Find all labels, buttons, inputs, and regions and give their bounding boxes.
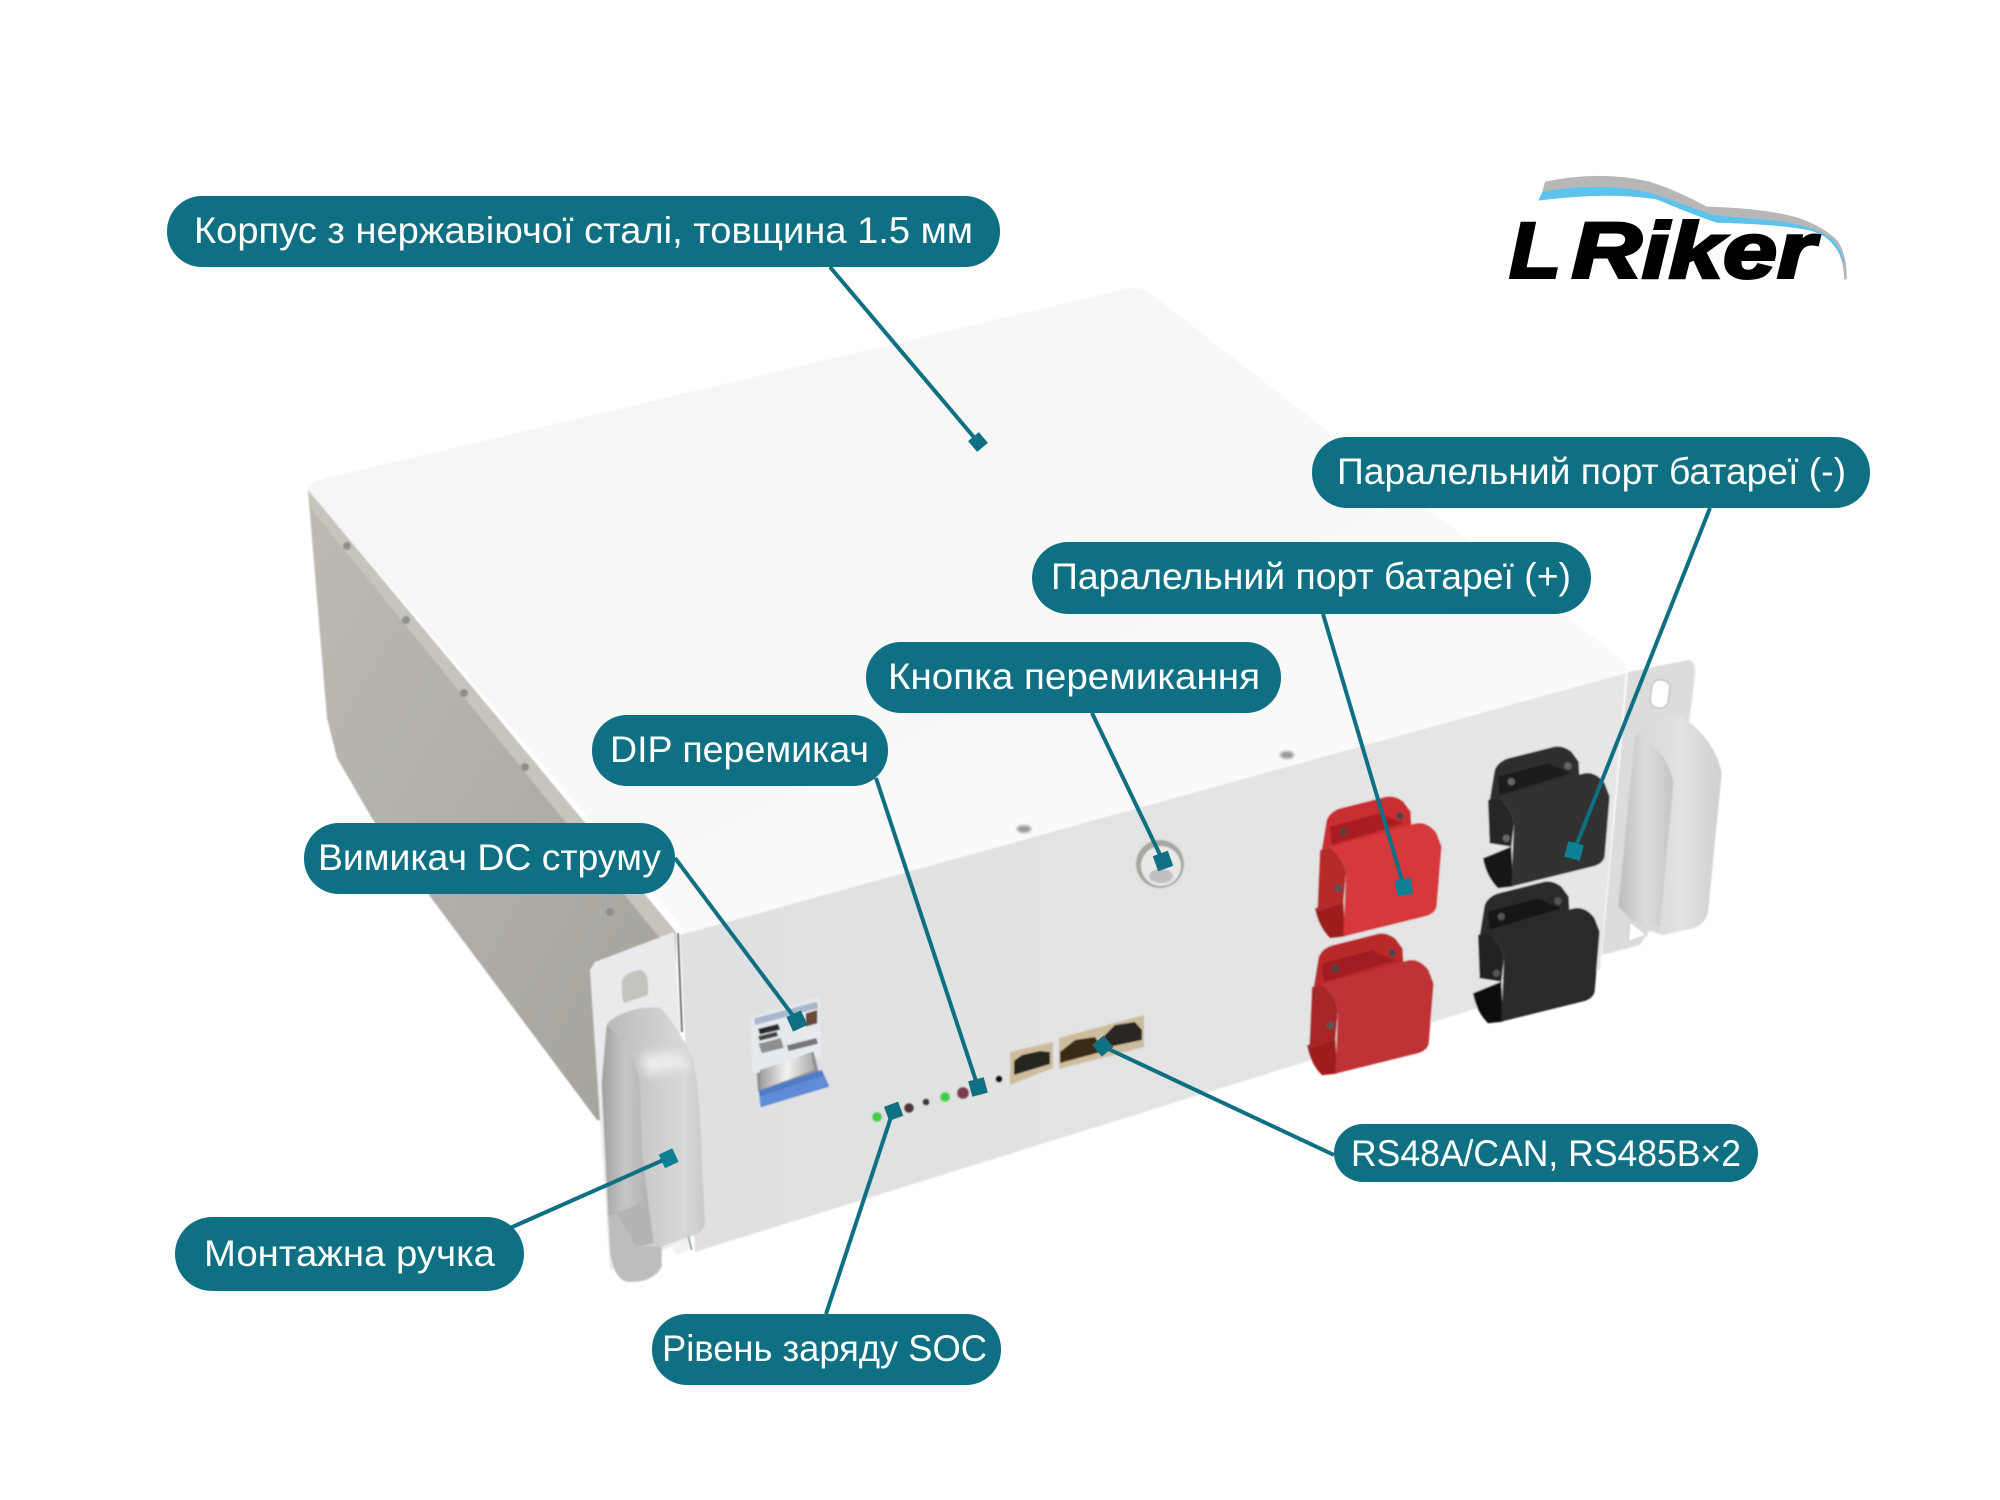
leader: toggle button xyxy=(1092,713,1173,871)
top screws xyxy=(1017,751,1294,833)
battery illustration xyxy=(308,288,1722,1282)
icon: red connector top xyxy=(1315,796,1442,938)
callout: DC breaker: Вимикач DC струму xyxy=(318,837,661,878)
panel: left side face xyxy=(308,490,676,1130)
icon: toggle button xyxy=(1136,840,1184,888)
icon: RJ45 ports xyxy=(1010,1015,1144,1085)
callout: RS485 ports xyxy=(1334,1124,1758,1182)
leader: RS485 xyxy=(1092,1035,1334,1155)
logo wordmark: Riker xyxy=(1572,207,1820,295)
front top lip xyxy=(680,664,1626,935)
right flange slot xyxy=(1649,679,1671,709)
flange edge xyxy=(678,933,682,1032)
callout: mounting handle xyxy=(175,1217,524,1291)
panel: front face xyxy=(680,673,1626,1252)
panel: top face xyxy=(308,288,1628,925)
leader: positive port xyxy=(1323,614,1413,896)
callout: DIP switch: DIP перемикач xyxy=(610,729,869,770)
icon: DC breaker xyxy=(751,997,830,1107)
leader: DC breaker xyxy=(675,858,808,1032)
panel: left mounting flange xyxy=(590,932,690,1270)
callout: RS485 ports: RS48A/CAN, RS485B×2 xyxy=(1351,1133,1741,1174)
left face lip strip xyxy=(308,490,676,958)
logo swoosh grey xyxy=(1540,176,1847,279)
icon: red connector bottom xyxy=(1307,933,1434,1075)
callout: stainless housing: Корпус з нержавіючої сталі, товщина 1.5 мм xyxy=(194,210,973,251)
side screws xyxy=(343,542,614,916)
leader: negative port xyxy=(1564,508,1710,861)
callout: DIP switch xyxy=(592,715,888,786)
callout: parallel port positive xyxy=(1032,542,1591,614)
logo wordmark: L xyxy=(1509,207,1561,295)
callout: parallel port negative xyxy=(1312,437,1870,508)
icon: black connector top xyxy=(1483,746,1610,888)
callout: SOC level: Рівень заряду SOC xyxy=(662,1328,987,1369)
callout: mounting handle: Монтажна ручка xyxy=(204,1233,495,1274)
leader: handle xyxy=(510,1148,679,1228)
callout: toggle button: Кнопка перемикання xyxy=(888,656,1260,697)
icon: status LEDs xyxy=(872,1076,1002,1122)
callout: toggle button xyxy=(866,642,1281,713)
icon: black connector bottom xyxy=(1473,881,1600,1023)
panel: right mounting flange xyxy=(1602,660,1695,955)
leader: DIP switch xyxy=(876,778,988,1097)
icon: right handle xyxy=(1618,715,1722,942)
callout: stainless housing xyxy=(167,196,1000,267)
callout: DC breaker xyxy=(304,823,675,894)
logo swoosh blue xyxy=(1538,187,1845,265)
callout: SOC level xyxy=(652,1314,1001,1385)
icon: left handle xyxy=(602,1007,705,1282)
leader: body xyxy=(830,267,988,452)
callout: parallel port positive: Паралельний порт батареї (+) xyxy=(1051,556,1571,597)
leader: SOC xyxy=(826,1102,903,1314)
callout: parallel port negative: Паралельний порт батареї (-) xyxy=(1337,451,1846,492)
logo wordmark xyxy=(1509,207,1820,295)
logo: L Riker xyxy=(1509,176,1847,295)
flange slot xyxy=(622,970,648,1003)
